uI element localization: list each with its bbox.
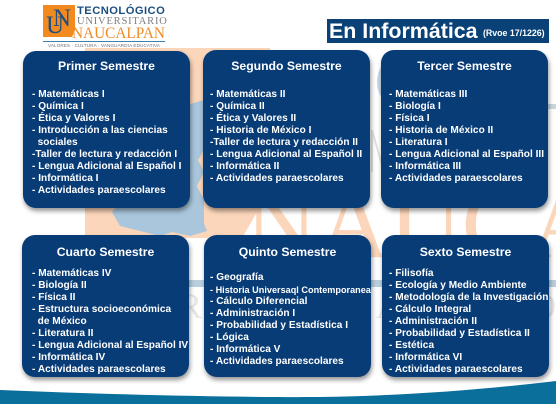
subject list: sociales [38,137,78,148]
subject list: - Lengua Adicional al Español II [210,149,362,160]
subject list: - Historia de México I [210,125,311,136]
subject list: - Lengua Adicional al Español III [389,149,544,160]
subject list: - Lengua Adicional al Español I [32,161,181,172]
subject list: - Estética [389,340,434,351]
panel: segundo semestre [203,50,370,208]
subject list: - Informática IV [32,352,105,363]
subject list: - Informática VI [389,352,462,363]
subject list: - Actividades paraescolares [389,364,523,375]
subject list: - Biología I [389,101,441,112]
subject list: - Actividades paraescolares [389,173,523,184]
subject list: - Ética y Valores II [210,113,296,124]
subject list: - Estructura socioeconómica [32,304,171,315]
subject list: - Lógica [210,332,249,343]
subject list: - Cálculo Integral [389,304,471,315]
subject list: - Biología II [32,280,87,291]
subject list [389,268,548,375]
logo emblem [43,5,75,38]
subject list: - Ética y Valores I [32,113,115,124]
heading: Primer Semestre [58,59,155,73]
title banner [327,19,549,43]
subject list: - Física II [32,292,75,303]
panel: tercer semestre [381,50,548,208]
watermark: pale stripe [545,104,556,109]
subject list: - Química II [210,101,265,112]
subject list: - Matemáticas I [32,89,105,100]
subject list: - Literatura I [389,137,448,148]
subject list: - Introducción a las ciencias [32,125,168,136]
subject list: - Física I [389,113,430,124]
subject list: - Matemáticas III [389,89,467,100]
watermark: blue scribble [112,100,207,236]
logo text: Universitario: UNIVERSITARIO [77,16,168,27]
panel: cuarto semestre [22,235,189,377]
panel: quinto semestre [204,235,371,377]
subject list: - Matemáticas IV [32,268,111,279]
subject list: - Administración I [210,308,295,319]
logo text: Naucalpan: NAUCALPAN [72,25,165,42]
subject list: - Probabilidad y Estadística II [389,328,530,339]
watermark: upper grey letters [372,130,384,172]
logo emblem: N [53,5,71,32]
logo rule [43,41,165,42]
watermark: pale blue arc [377,60,407,104]
subject list: - Literatura II [32,328,93,339]
subject list: - Actividades paraescolares [32,364,166,375]
subject list: - Informática I [32,173,98,184]
heading: Sexto Semestre [420,245,511,259]
subject list: - Informática II [210,161,279,172]
watermark: grey tagline letters: RSITARIO [178,286,556,326]
heading: En Informática [329,19,478,43]
subject list: - Metodología de la Investigación [389,292,548,303]
watermark: blue stripe [85,280,556,287]
heading: Segundo Semestre [231,59,342,73]
subject list: - Probabilidad y Estadística I [210,320,348,331]
heading: Quinto Semestre [239,245,336,259]
subject list: - Actividades paraescolares [210,173,344,184]
subject list: - Matemáticas II [210,89,286,100]
subject list: - Administración II [389,316,477,327]
subject list: - Química I [32,101,84,112]
subject list: - Ecología y Medio Ambiente [389,280,527,291]
subject list [210,272,371,367]
subject list: de México [38,316,87,327]
bottom wave [0,381,556,404]
RVOE note: (Rvoe 17/1226) [483,28,545,38]
subject list: - Cálculo Diferencial [210,296,307,307]
logo tagline: VALORES · CULTURA · VANGUARDIA EDUCATIVA [48,43,160,48]
subject list: -Taller de lectura y redacción I [32,149,177,160]
watermark: peach square [85,48,270,238]
subject list: - Informática V [210,344,280,355]
logo [43,4,168,48]
subject list: -Taller de lectura y redacción II [210,137,358,148]
subject list: - Filisofía [389,268,434,279]
subject list: - Actividades paraescolares [210,356,344,367]
logo text: Tecnológico: TECNOLÓGICO [77,5,165,17]
subject list: - Historia de México II [389,125,493,136]
heading: Tercer Semestre [417,59,512,73]
subject list: - Actividades paraescolares [32,185,166,196]
panel: sexto semestre [382,235,549,377]
panel: primer semestre [23,51,190,208]
subject list: - Lengua Adicional al Español IV [32,340,188,351]
heading: Cuarto Semestre [57,245,154,259]
subject list [389,89,544,184]
subject list [210,89,362,184]
subject list [32,89,181,196]
subject list [32,268,188,375]
subject list: - Geografía [210,272,264,283]
subject list: - Historia Universaql Contemporanea [210,285,371,295]
subject list: - Informática III [389,161,461,172]
